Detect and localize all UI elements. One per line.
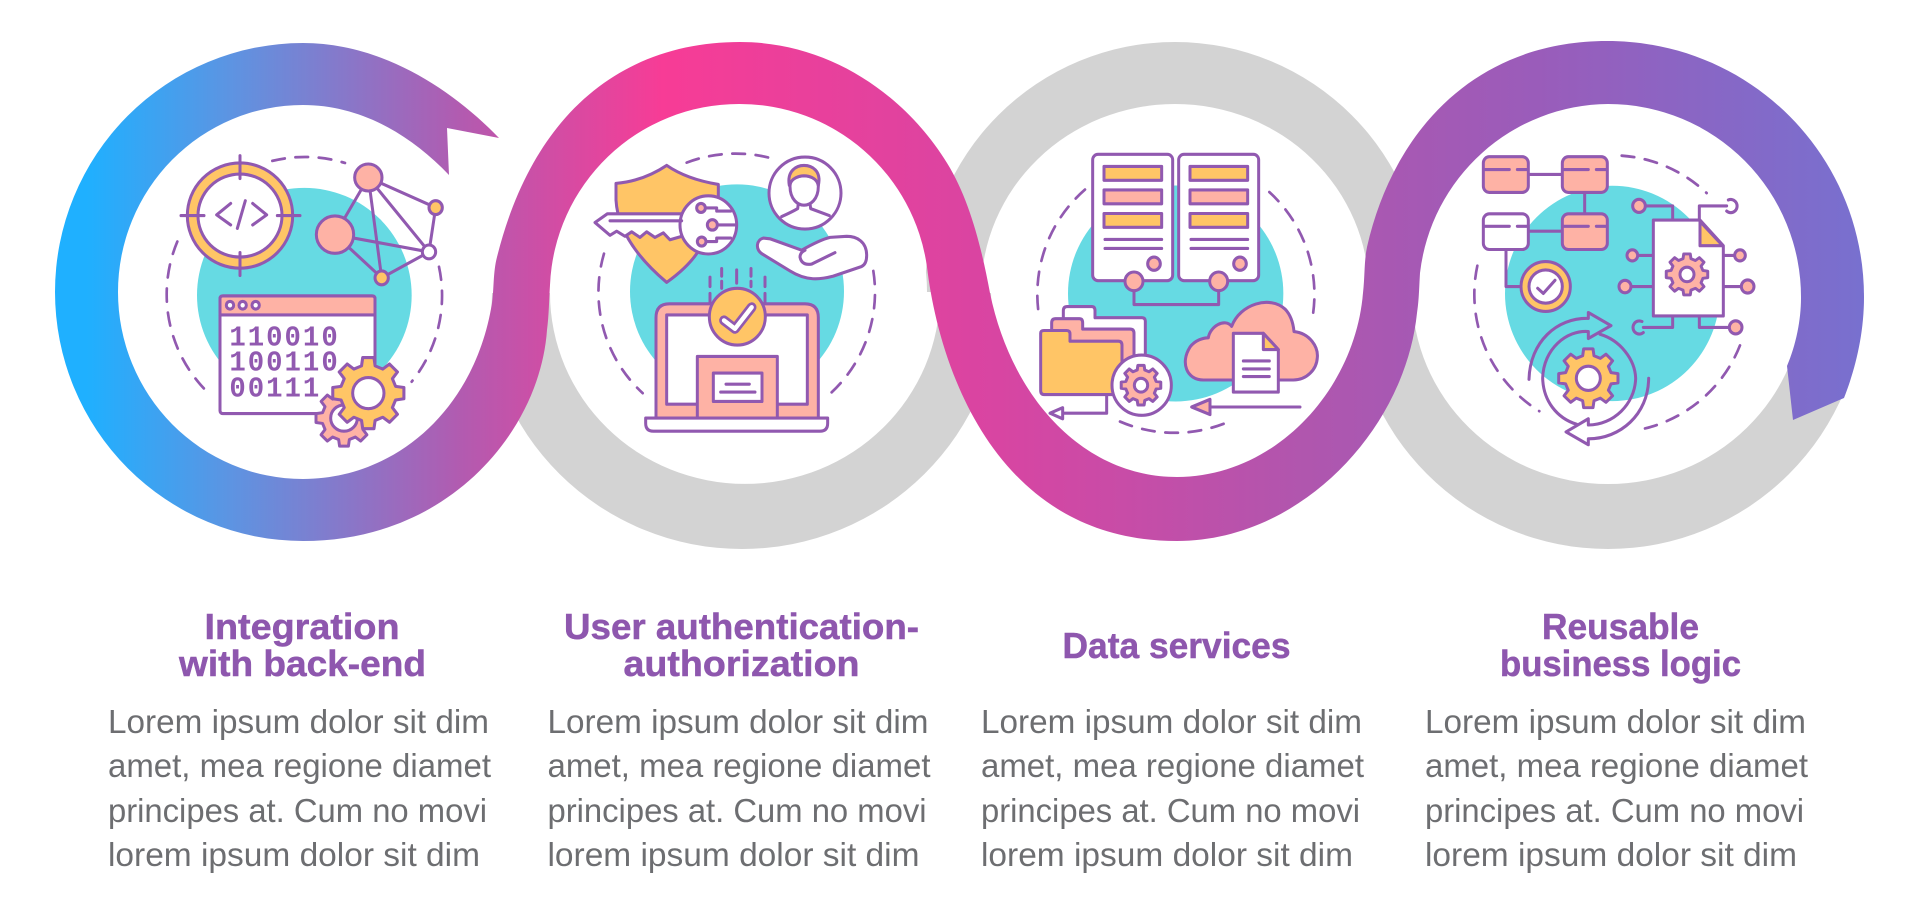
body text	[108, 703, 491, 873]
icon: falling data lines	[710, 269, 765, 306]
icon: cloud	[1185, 302, 1317, 380]
icon: digital key	[595, 196, 737, 254]
body text: principes at. Cum no movi	[108, 792, 487, 829]
icon: laptop	[646, 304, 828, 431]
body text	[1425, 703, 1808, 873]
heading: business logic	[1500, 643, 1741, 684]
body text: lorem ipsum dolor sit dim	[108, 836, 480, 873]
body text: lorem ipsum dolor sit dim	[981, 836, 1353, 873]
grey ring: step 2	[484, 293, 1000, 549]
icon: pink gear	[316, 390, 372, 446]
teal backdrop circle	[630, 184, 844, 398]
icon: server left	[1093, 154, 1173, 281]
body text: amet, mea regione diamet	[981, 747, 1364, 784]
icon: binary code window: 100110	[229, 348, 340, 379]
icon: cycle gear	[1559, 349, 1618, 408]
icon: circuit leads	[1619, 199, 1754, 334]
body text: Lorem ipsum dolor sit dim	[108, 703, 489, 740]
icon: binary code window: 00111	[229, 374, 321, 405]
icon: user avatar	[769, 157, 841, 229]
body text: lorem ipsum dolor sit dim	[1425, 836, 1797, 873]
body text: amet, mea regione diamet	[1425, 747, 1808, 784]
heading	[1500, 606, 1741, 684]
dashed orbit	[1037, 190, 1314, 433]
body text: principes at. Cum no movi	[981, 792, 1360, 829]
arrow: cycle top	[1529, 312, 1611, 424]
icon: server connection	[1125, 272, 1228, 305]
body text: Lorem ipsum dolor sit dim	[981, 703, 1362, 740]
icon: check badge	[1521, 262, 1570, 311]
body text: amet, mea regione diamet	[548, 747, 930, 784]
icon group: user authentication-authorization	[595, 154, 875, 431]
icon: binary code window	[220, 296, 375, 414]
icon: check badge	[709, 288, 765, 345]
icon: shield	[616, 165, 718, 282]
grey ring: step 3	[925, 42, 1425, 292]
heading: Integration	[204, 606, 400, 647]
icon: open hand	[757, 236, 867, 279]
gradient ribbon with arrow ends	[55, 41, 1864, 541]
arrow: folder output	[1050, 396, 1107, 419]
icon: server right	[1179, 154, 1259, 281]
body text: principes at. Cum no movi	[1425, 792, 1804, 829]
heading	[564, 606, 919, 684]
heading: User authentication-	[564, 606, 919, 647]
icon: binary code window: 110010	[229, 323, 340, 355]
dashed orbit	[1474, 156, 1740, 428]
teal backdrop circle	[1505, 186, 1720, 401]
grey ring: step 4	[1352, 293, 1864, 549]
arrow: cycle bottom	[1566, 334, 1649, 445]
body text: lorem ipsum dolor sit dim	[548, 836, 920, 873]
icon: code target	[181, 156, 300, 275]
ribbon track: grey rings and gradient ribbon	[55, 41, 1864, 549]
teal backdrop circle	[1068, 185, 1283, 401]
icon group: reusable business logic	[1474, 156, 1754, 445]
icon: orange gear	[333, 358, 404, 429]
heading: Reusable	[1542, 606, 1699, 647]
heading: with back-end	[178, 643, 426, 684]
teal backdrop circle	[197, 188, 412, 402]
icon: gear document	[1653, 220, 1723, 316]
icon: document	[1233, 333, 1278, 392]
icon: folder gear badge	[1112, 355, 1171, 415]
dashed orbit	[167, 157, 442, 395]
heading: authorization	[624, 643, 860, 684]
heading: Data services	[1062, 625, 1290, 666]
white circle interiors	[116, 105, 1798, 481]
body text: Lorem ipsum dolor sit dim	[548, 703, 928, 740]
icon: flow blocks	[1483, 157, 1607, 287]
body text: amet, mea regione diamet	[108, 747, 491, 784]
dashed orbit	[598, 154, 875, 394]
heading	[178, 606, 426, 684]
icon: network nodes	[316, 164, 442, 285]
text block: integration with back-end	[108, 606, 491, 873]
icon: folders	[1041, 307, 1145, 395]
arrow: cloud input	[1192, 399, 1300, 415]
body text: principes at. Cum no movi	[548, 792, 926, 829]
text block: reusable business logic	[1425, 606, 1808, 873]
body text	[548, 703, 930, 873]
body text: Lorem ipsum dolor sit dim	[1425, 703, 1806, 740]
icon group: integration with back-end	[167, 156, 442, 446]
body text	[981, 703, 1364, 873]
text block: data services	[981, 625, 1364, 873]
icon group: data services	[1037, 154, 1317, 433]
text block: user authentication-authorization	[548, 606, 930, 873]
